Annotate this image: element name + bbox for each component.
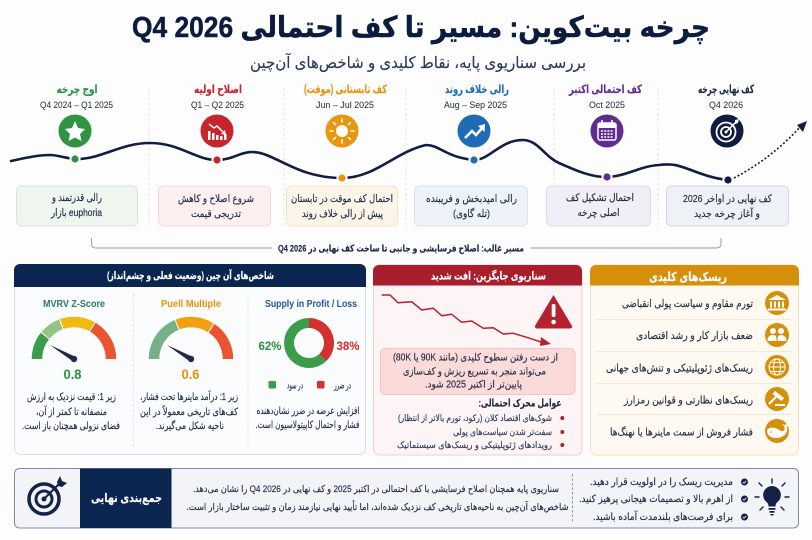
summary heading block: جمع‌بندی نهایی [91,491,162,505]
timeline stage: final cycle bottom: کف نهایی در اواخر 2026 [683,193,772,205]
timeline stage: cycle peak: رالی قدرتمند و [51,192,102,204]
timeline stage: counter-trend rally: رالی خلاف روند [445,84,509,97]
timeline stage: cycle peak: euphoria بازار [50,207,102,219]
risk: regulation [623,387,789,411]
alternative scenario header [373,265,582,286]
donut chart: supply in profit and loss: در سود [287,380,303,392]
timeline stage: counter-trend rally [414,84,528,226]
subtitle: بررسی سناریوی پایه، نقاط کلیدی و شاخص‌های آن‌چین [250,53,586,73]
callout: breakdown of key levels: می‌تواند منجر به تسریع ریزش و کف‌سازی [403,366,546,378]
timeline price curve [11,121,807,185]
timeline stage: final cycle bottom: و آغاز چرخه جدید [694,207,760,220]
gauge: MVRV Z-Score: زیر 1: قیمت نزدیک به ارزش [27,392,116,403]
risk: labour market weakness [636,323,789,347]
gauge: Puell Multiple: ناحیه شکل می‌گیرند. [156,420,224,432]
gauge: MVRV Z-Score [22,299,120,432]
panel: on-chain indicators [14,264,366,454]
summary paragraph: سناریوی پایه همچنان اصلاح فرسایشی با کف احتمالی در اکتبر 2025 و کف نهایی در Q4 2026 را نشان می‌دهد. [193,484,559,495]
timeline stage: initial correction: شروع اصلاح و کاهش [178,193,254,205]
probable drivers list: رویدادهای ژئوپلیتیکی و ریسک‌های سیستماتیک [397,440,552,450]
timeline stage: summer bottom [286,84,398,226]
alternative scenario header: سناریوی جایگزین: افت شدید [431,270,546,282]
panel: final summary [14,468,798,528]
summary heading block [80,468,172,528]
gauge: MVRV Z-Score: MVRV Z-Score [43,299,105,310]
risk: geopolitics [606,355,789,379]
gauge: MVRV Z-Score: منصفانه تا کمتر از آن، [36,405,107,418]
action checklist: برای فرصت‌های بلندمدت آماده باشید. [593,510,733,523]
action checklist: مدیریت ریسک را در اولویت قرار دهید. [590,477,733,488]
risk: labour market weakness: ضعف بازار کار و رشد اقتصادی [636,330,753,342]
timeline stage: probable October bottom [546,84,650,226]
dominant path bracket [92,238,721,254]
timeline stage: probable October bottom: Oct 2025 [589,100,625,110]
timeline stage: counter-trend rally: (تله گاوی) [453,207,490,220]
on-chain panel header [14,264,366,287]
donut chart: supply in profit and loss [256,299,360,431]
panel: alternative scenario [373,265,582,455]
probable drivers list: شوک‌های اقتصاد کلان (رکود، تورم بالاتر از انتظار) [398,413,552,423]
gauge: Puell Multiple: Puell Multiple [161,299,221,310]
icon: target with arrow [29,476,67,514]
gauge: Puell Multiple: کف‌های تاریخی معمولاً در این [140,405,238,418]
timeline stage: initial correction: اصلاح اولیه [194,84,242,97]
falling price line [382,295,551,346]
timeline stage: summer bottom: Jun – Jul 2025 [316,100,374,110]
action checklist: از اهرم بالا و تصمیمات هیجانی پرهیز کنید. [579,494,733,505]
risk: geopolitics: ریسک‌های ژئوپلیتیکی و تنش‌های جهانی [606,362,753,374]
donut chart: supply in profit and loss: فشار و احتمال کاپیتولاسیون است. [256,420,360,431]
timeline stage: final cycle bottom [666,84,788,226]
timeline stage: final cycle bottom: Q4 2026 [709,100,743,110]
probable drivers list: عوامل محرک احتمالی: [478,398,562,410]
timeline stage: summer bottom: احتمال کف موقت در تابستان [291,193,393,205]
donut chart: supply in profit and loss: افزایش عرضه در ضرر نشان‌دهنده [256,406,360,417]
risk: miner and whale selling [610,419,790,443]
timeline stage: initial correction: Q1 – Q2 2025 [191,100,244,110]
donut chart: supply in profit and loss: 38% [336,339,360,353]
icon: warning triangle [535,296,572,328]
callout: breakdown of key levels [380,348,575,394]
gauge: Puell Multiple: 0.6 [182,367,200,382]
timeline stage: probable October bottom: احتمال تشکیل کف [566,192,634,204]
gauge: Puell Multiple [140,299,238,432]
donut chart: supply in profit and loss: در ضرر [333,380,351,392]
dominant path bracket: مسیر غالب: اصلاح فرسایشی و جانبی تا ساخت کف نهایی در Q4 2026 [278,244,524,254]
timeline stage: cycle peak: اوج چرخه [56,84,98,97]
title: چرخه بیت‌کوین: مسیر تا کف احتمالی Q4 2026 [132,12,710,45]
summary paragraph [186,484,569,513]
risk: inflation and tight policy [622,291,789,315]
action checklist [579,477,748,523]
probable drivers list [397,398,564,450]
risk: inflation and tight policy: تورم مقاوم و سیاست پولی انقباضی [622,298,753,310]
risk: regulation: ریسک‌های نظارتی و قوانین رمزارز [623,394,753,406]
icon: light bulb [755,479,789,516]
callout: breakdown of key levels: پایین‌تر از اکتبر 2025 شود. [425,380,522,390]
timeline stage: cycle peak: Q4 2024 – Q1 2025 [40,100,113,110]
timeline stage: final cycle bottom: کف نهایی چرخه [698,84,754,96]
timeline stage: initial correction [158,84,270,226]
on-chain panel header: شاخص‌های آن چین (وضعیت فعلی و چشم‌انداز) [107,269,274,282]
key risks header: ریسک‌های کلیدی [649,270,727,284]
timeline stage: initial correction: تدریجی قیمت [191,208,241,220]
gauge: Puell Multiple: زیر 1: درآمد ماینرها تحت فشار، [140,390,238,403]
panel: key risks [590,265,799,455]
summary paragraph: شاخص‌های آن‌چین به ناحیه‌های تاریخی کف نزدیک شده‌اند، اما تأیید نهایی نیازمند زمان و تثبیت ساختار بازار است. [186,500,569,513]
timeline stage: summer bottom: پیش از رالی خلاف روند [302,208,383,220]
donut chart: supply in profit and loss: Supply in Profit / Loss [265,299,357,310]
key risks header [590,265,799,286]
gauge: MVRV Z-Score: 0.8 [64,367,82,382]
timeline stage: probable October bottom: اصلی چرخه [578,207,620,219]
callout: breakdown of key levels: از دست رفتن سطوح کلیدی (مانند 90K یا 80K) [393,352,558,364]
donut chart: supply in profit and loss: 62% [258,339,282,353]
risk: miner and whale selling: فشار فروش از سمت ماینرها یا نهنگ‌ها [610,426,753,438]
timeline stage: summer bottom: کف تابستانی (موقت) [304,84,387,97]
timeline stage: cycle peak [16,84,138,226]
probable drivers list: سفت‌تر شدن سیاست‌های پولی [453,427,552,437]
timeline stage: counter-trend rally: رالی امیدبخش و فریبنده [426,193,517,205]
gauge: MVRV Z-Score: فضای نزولی همچنان باز است. [22,421,120,432]
timeline stage: counter-trend rally: Aug – Sep 2025 [444,100,507,110]
timeline stage: probable October bottom: کف احتمالی اکتبر [568,84,642,96]
